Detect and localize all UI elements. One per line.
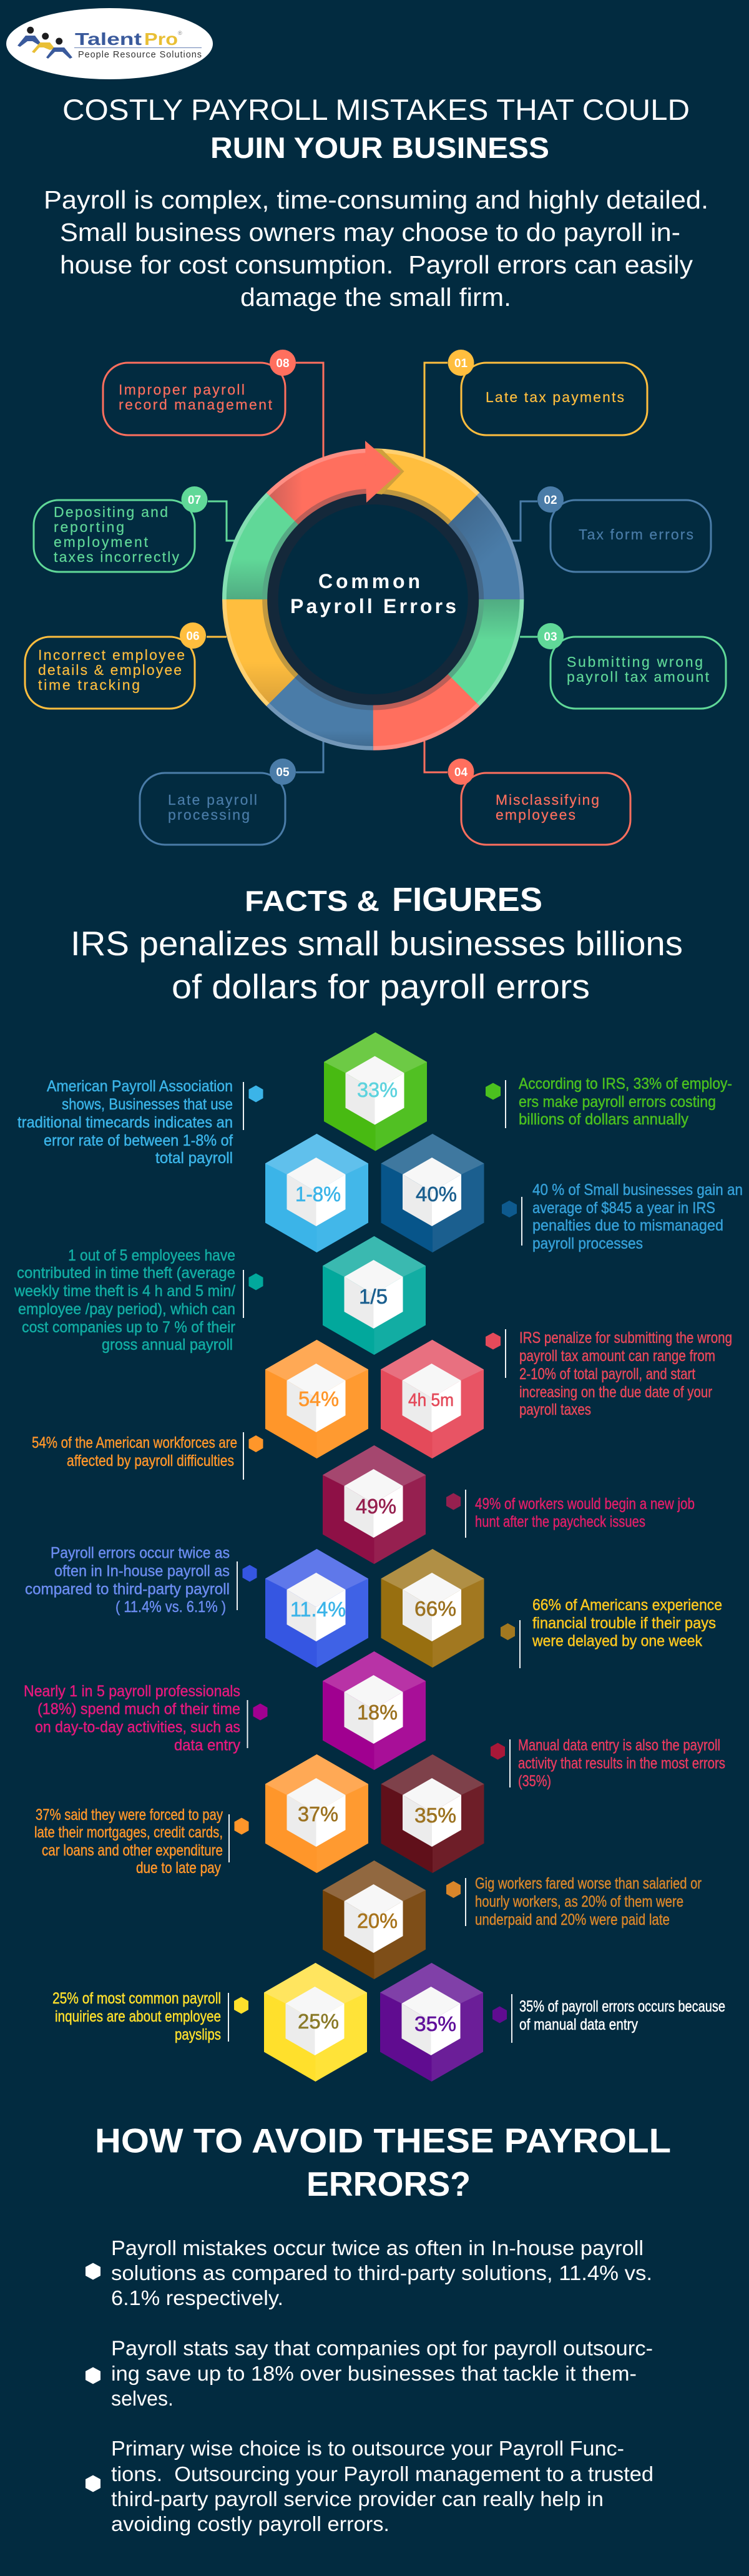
callout 01: late tax payments (424, 350, 647, 458)
text: 33% of employers: According to IRS, 33% of employ- (519, 1075, 732, 1093)
logo: TalentPro: ® (178, 30, 182, 36)
text: workforces affected: affected by payroll difficulties (67, 1452, 234, 1470)
text: wrong tax amount penalty: increasing on the due date of your (519, 1384, 712, 1401)
callout 07: depositing and reporting employment taxes incorrectly: Depositing and (54, 504, 168, 520)
callout 08: improper payroll record management: record management (119, 396, 273, 413)
callout 03: submitting wrong payroll tax amount: payroll tax amount (567, 669, 710, 685)
text: time theft: contributed in time theft (average (17, 1264, 235, 1282)
text: IRS penalties average: average of $845 a year in IRS (532, 1199, 715, 1217)
text: payroll professionals: Nearly 1 in 5 payroll professionals (24, 1683, 240, 1700)
intro paragraph: Payroll is complex, time-consuming and highly detailed. (44, 185, 708, 214)
fact: 18% (24, 1651, 426, 1770)
subheading: IRS penalties (71, 924, 683, 1006)
text: in-house errors (25, 1545, 230, 1616)
tip text (111, 2336, 653, 2410)
callout 08: improper payroll record management (103, 350, 323, 457)
icon: amber bullet (446, 1881, 461, 1898)
text: forced to pay late: 37% said they were forced to pay (36, 1806, 223, 1824)
text: time theft: gross annual payroll (102, 1336, 233, 1354)
callout 04: misclassifying employees (424, 741, 630, 845)
icon: yellow bullet (234, 1997, 248, 2014)
tip text: third-party payroll service provider can really help in (111, 2487, 604, 2510)
text: wrong tax amount penalty: payroll taxes (519, 1401, 591, 1418)
tip text: Payroll stats say that companies opt for payroll outsourc- (111, 2336, 653, 2360)
hexagon 66% (381, 1549, 484, 1668)
fact: 11.4% (25, 1545, 368, 1668)
fact: 66% (381, 1549, 722, 1668)
text: time theft: weekly time theft is 4 h and 5 min/ (14, 1282, 235, 1300)
value 37%: 37% (298, 1802, 338, 1826)
ring centre label (290, 570, 456, 617)
text: gig workers: hourly workers, as 20% of them were (475, 1893, 683, 1910)
text: time theft (14, 1247, 235, 1354)
text: payroll professionals: (18%) spend much of their time (37, 1701, 240, 1718)
callout 07: depositing and reporting employment taxes incorrectly (34, 486, 235, 572)
fact: 35% of errors manual entry (380, 1963, 725, 2082)
icon: bronze bullet (501, 1623, 515, 1640)
callout 02: tax form errors: Tax form errors (579, 526, 693, 543)
hexagon 37% (265, 1754, 368, 1873)
tip text: Primary wise choice is to outsource your Payroll Func- (111, 2437, 624, 2460)
fact: 4h 5m (381, 1329, 732, 1458)
value 1-8%: 1-8% (295, 1182, 341, 1206)
ring centre label: Payroll Errors (290, 595, 456, 617)
callout 08: improper payroll record management: 08 (276, 357, 290, 370)
hexagon 33% (324, 1033, 427, 1151)
value 54%: 54% (298, 1387, 339, 1410)
hexagon 1-8% (265, 1134, 368, 1252)
text: manual data entry: of manual data entry (519, 2016, 638, 2033)
text: timecards error rate: error rate of between 1-8% of (44, 1132, 233, 1149)
heading: how to avoid: HOW TO AVOID THESE PAYROLL (95, 2121, 671, 2160)
hexagon 40% (381, 1134, 484, 1252)
text: new job hunt: hunt after the paycheck issues (475, 1513, 645, 1531)
tip text (111, 2437, 654, 2535)
tip 1 (86, 2236, 652, 2309)
title: RUIN YOUR BUSINESS (210, 131, 549, 164)
text: new job hunt (475, 1495, 695, 1531)
callout 03: submitting wrong payroll tax amount (520, 623, 726, 709)
fact: 37% (34, 1754, 368, 1877)
text: wrong tax amount penalty: 2-10% of total payroll, and start (519, 1365, 695, 1383)
callout 02: tax form errors: 02 (544, 494, 557, 507)
text: timecards error rate: American Payroll Association (47, 1078, 233, 1095)
tip 3 (86, 2437, 654, 2535)
icon: crimson bullet (491, 1743, 505, 1759)
hexagon 20% (323, 1861, 426, 1979)
text: gig workers (475, 1875, 702, 1929)
value 18%: 18% (357, 1701, 398, 1724)
callout 06: incorrect employee details and time tracking: Incorrect employee (38, 647, 185, 663)
text: workforces affected (32, 1434, 237, 1470)
text: employee payslips: inquiries are about employee (55, 2008, 221, 2025)
text: timecards error rate (17, 1078, 233, 1167)
callout 07: depositing and reporting employment taxes incorrectly: taxes incorrectly (54, 549, 180, 565)
callout 05: late payroll processing: processing (168, 807, 250, 823)
value 40%: 40% (416, 1182, 457, 1206)
text: forced to pay late: car loans and other expenditure (42, 1842, 223, 1859)
text: manual data entry errors: (35%) (518, 1772, 551, 1790)
text: financial trouble: financial trouble if their pays (532, 1615, 716, 1632)
title (62, 93, 690, 164)
heading: facts and figures: FIGURES (392, 881, 542, 918)
fact: 20% (323, 1861, 702, 1979)
fact: 54% (32, 1340, 368, 1480)
segmented ring chart with arrow (245, 441, 502, 728)
callout 01: late tax payments: Late tax payments (486, 389, 624, 405)
text: IRS penalties average (532, 1181, 743, 1252)
callout 07: depositing and reporting employment taxes incorrectly: employment (54, 534, 149, 550)
tip text: selves. (111, 2387, 174, 2410)
callout 01: late tax payments: 01 (454, 357, 468, 370)
fact: manual data entry 35% (381, 1737, 725, 1873)
fact: 33% (324, 1033, 732, 1151)
text: new job hunt: 49% of workers would begin a new job (475, 1495, 695, 1513)
text: time theft: employee /pay period), which can (18, 1300, 235, 1318)
text: employee payslips (52, 1990, 221, 2043)
icon: maroon bullet (446, 1493, 461, 1510)
callout 04: misclassifying employees: Misclassifying (496, 792, 599, 808)
text: wrong tax amount penalty: payroll tax amount can range from (519, 1347, 715, 1365)
heading: facts and figures (245, 881, 542, 918)
text: IRS penalties average: penalties due to mismanaged (532, 1217, 723, 1234)
icon: white bullet (86, 2367, 100, 2384)
hexagon 1/5 (323, 1236, 426, 1355)
text: gig workers: Gig workers fared worse than salaried or (475, 1875, 702, 1892)
callout 03: submitting wrong payroll tax amount: Submitting wrong (567, 654, 703, 670)
hexagon 4h 5m (381, 1340, 484, 1458)
icon: orange bullet (235, 1818, 248, 1834)
tip text: avoiding costly payroll errors. (111, 2512, 389, 2535)
hexagon 18% (323, 1651, 426, 1770)
fact: 1-8% (17, 1078, 368, 1252)
callout 04: misclassifying employees: employees (496, 807, 575, 823)
text: 33% of employers (519, 1075, 732, 1128)
hexagon 54% (265, 1340, 368, 1458)
icon: white bullet (86, 2475, 100, 2492)
text: IRS penalties average: payroll processes (532, 1235, 643, 1252)
text: workforces affected: 54% of the American workforces are (32, 1434, 237, 1452)
tip text: tions. Outsourcing your Payroll management to a trusted (111, 2462, 654, 2485)
intro paragraph: house for cost consumption. Payroll errors can easily (60, 250, 693, 279)
text: wrong tax amount penalty (519, 1329, 732, 1418)
value 20%: 20% (357, 1909, 398, 1932)
hexagon 35% dark red (381, 1754, 484, 1873)
text: timecards error rate: total payroll (155, 1149, 233, 1167)
logo: TalentPro: Pro (144, 29, 178, 49)
fact: 40% (381, 1134, 743, 1252)
fact: 49% (323, 1445, 695, 1564)
value 35%: 35% (414, 1804, 456, 1827)
value 35%: 35% (414, 2012, 456, 2035)
text: timecards error rate: shows, Businesses that use (62, 1096, 233, 1113)
callout 03: submitting wrong payroll tax amount: 03 (544, 631, 557, 644)
callout 07: depositing and reporting employment taxes incorrectly: 07 (188, 494, 201, 507)
text: time theft: cost companies up to 7 % of their (22, 1319, 235, 1336)
icon: purple bullet (492, 2007, 507, 2023)
logo: TalentPro: Talent (75, 29, 142, 49)
text: financial trouble: were delayed by one week (532, 1632, 702, 1649)
arrow shadow (373, 448, 404, 494)
intro paragraph: Small business owners may choose to do payroll in- (60, 218, 680, 247)
text: financial trouble: 66% of Americans experience (532, 1596, 722, 1614)
logo: TalentPro (6, 8, 213, 79)
value 66%: 66% (414, 1597, 456, 1620)
text: payroll professionals: data entry (174, 1737, 240, 1754)
text: 33% of employers: billions of dollars annually (519, 1111, 688, 1128)
hexagon 11.4% (265, 1549, 368, 1668)
tip text: Payroll mistakes occur twice as often in In-house payroll (111, 2236, 644, 2259)
tip text (111, 2236, 652, 2309)
hexagon 49% (323, 1445, 426, 1564)
value 25%: 25% (298, 2010, 339, 2033)
title: COSTLY PAYROLL MISTAKES THAT COULD (62, 93, 690, 126)
icon: blue bullet (242, 1565, 257, 1582)
text: timecards error rate: traditional timecards indicates an (17, 1114, 233, 1131)
subheading: IRS penalties: of dollars for payroll errors (172, 967, 590, 1006)
intro paragraph: damage the small firm. (240, 283, 511, 312)
text: employee payslips: payslips (175, 2026, 221, 2043)
tip text: ing save up to 18% over businesses that tackle it them- (111, 2362, 637, 2385)
icon: navy bullet (502, 1201, 517, 1217)
text: forced to pay late (34, 1806, 223, 1877)
callout 06: incorrect employee details and time tracking (25, 622, 227, 709)
tip text: solutions as compared to third-party solutions, 11.4% vs. (111, 2261, 652, 2284)
text: time theft: 1 out of 5 employees have (68, 1247, 235, 1264)
callout 02: tax form errors (511, 486, 711, 572)
callout 05: late payroll processing (140, 741, 323, 845)
icon: red bullet (486, 1332, 501, 1350)
arrow head (365, 441, 401, 503)
tip text: 6.1% respectively. (111, 2286, 283, 2309)
subheading: IRS penalties: IRS penalizes small businesses billions (71, 924, 683, 963)
callout 06: incorrect employee details and time tracking: 06 (186, 630, 200, 643)
text: forced to pay late: due to late pay (136, 1859, 221, 1877)
tip 2 (86, 2336, 653, 2410)
hexagon 25% (264, 1963, 367, 2082)
callout 05: late payroll processing: 05 (276, 766, 290, 779)
text: in-house errors: ( 11.4% vs. 6.1% ) (115, 1598, 226, 1616)
text: employee payslips: 25% of most common payroll (52, 1990, 221, 2007)
callout 04: misclassifying employees: 04 (454, 766, 468, 779)
ring centre label: Common (318, 570, 420, 592)
icon: green bullet (486, 1083, 501, 1100)
text: in-house errors: compared to third-party payroll (25, 1581, 230, 1598)
callout 08: improper payroll record management: Improper payroll (119, 381, 245, 398)
intro paragraph (44, 185, 708, 312)
text: gig workers: underpaid and 20% were paid late (475, 1911, 670, 1929)
value 49%: 49% (356, 1495, 396, 1518)
text: 33% of employers: ers make payroll errors costing (519, 1093, 716, 1111)
callout 06: incorrect employee details and time tracking: time tracking (38, 677, 140, 693)
value 4h 5m: 4h 5m (408, 1390, 454, 1410)
hexagon 35% purple (380, 1963, 483, 2082)
icon: cyan bullet (248, 1085, 263, 1103)
heading: how to avoid (95, 2121, 671, 2203)
text: manual data entry errors (518, 1737, 725, 1790)
text: forced to pay late: late their mortgages, credit cards, (34, 1824, 223, 1841)
text: payroll professionals: on day-to-day activities, such as (35, 1718, 240, 1736)
icon: magenta bullet (253, 1703, 267, 1721)
value 1/5: 1/5 (359, 1285, 388, 1308)
panel: common payroll errors (25, 350, 726, 845)
text: in-house errors: often in In-house payroll as (54, 1562, 230, 1580)
callout 06: incorrect employee details and time tracking: details & employee (38, 662, 182, 678)
icon: teal bullet (248, 1274, 263, 1290)
icon: white bullet (86, 2263, 100, 2280)
callout 05: late payroll processing: Late payroll (168, 792, 257, 808)
text: manual data entry (519, 1998, 725, 2033)
heading: how to avoid: ERRORS? (306, 2165, 471, 2203)
logo: TalentPro: People Resource Solutions (78, 50, 202, 60)
value 33%: 33% (357, 1078, 398, 1101)
text: financial trouble (532, 1596, 722, 1649)
fact: 1/5 (14, 1236, 426, 1355)
icon: orange bullet (248, 1435, 263, 1452)
value 11.4%: 11.4% (290, 1598, 346, 1621)
callout 07: depositing and reporting employment taxes incorrectly: reporting (54, 519, 124, 535)
text: in-house errors: Payroll errors occur twice as (51, 1545, 230, 1562)
text: payroll professionals (24, 1683, 240, 1754)
heading: facts and figures: FACTS & (245, 885, 379, 917)
fact: 25% (52, 1963, 367, 2082)
